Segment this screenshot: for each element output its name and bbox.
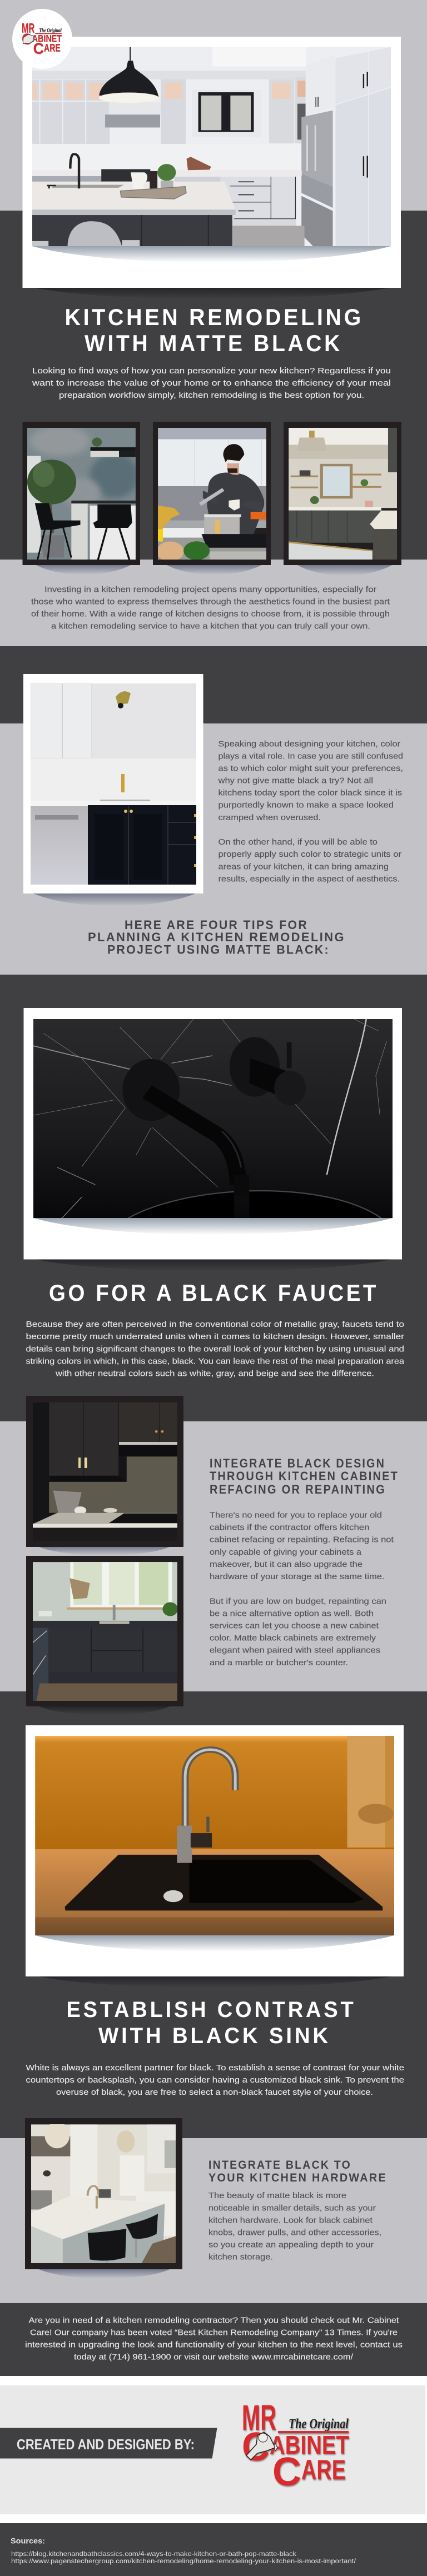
- title: [64, 304, 364, 356]
- logo badge: [12, 9, 72, 69]
- heading: kitchen hardware: [208, 2158, 387, 2184]
- paragraph: faucet: with other neutral colors such as white, gray, and beige and see the difference.: [55, 1369, 374, 1378]
- paragraph: designing your kitchen: purportedly known to make a space looked: [218, 801, 394, 810]
- title: establish contrast: ESTABLISH CONTRAST: [67, 1998, 356, 2022]
- footer logo: C: [242, 2425, 270, 2469]
- paragraph: faucet: [26, 1320, 405, 1378]
- title: KITCHEN REMODELING: [64, 304, 364, 330]
- title: establish contrast: WITH BLACK SINK: [98, 2024, 331, 2048]
- paragraph: refacing: cabinets if the contractor offers kitchen: [210, 1524, 369, 1532]
- heading: cabinet refacing: THROUGH KITCHEN CABINET: [210, 1469, 399, 1483]
- closing call to action: [25, 2316, 403, 2362]
- paragraph: refacing: only capable of giving your cabinets a: [210, 1548, 362, 1557]
- paragraph: faucet: striking colors in which, in this case, black. You can leave the rest of the meal preparation area: [26, 1357, 405, 1366]
- paragraph: hardware: kitchen hardware. Look for black cabinet: [208, 2216, 373, 2225]
- sources: [11, 2537, 356, 2565]
- footer logo: ARE: [301, 2454, 346, 2485]
- footer logo: [242, 2398, 349, 2494]
- paragraph: refacing: elegant when paired with steel appliances: [210, 1646, 380, 1655]
- paragraph: designing your kitchen: as to which color might suit your preferences,: [218, 765, 403, 773]
- paragraph: faucet: become pretty much underrated units when it comes to kitchen design. However, smaller: [26, 1332, 404, 1341]
- intro paragraph: preparation workflow simply, kitchen remodeling is the best option for you.: [59, 391, 364, 400]
- hero image scene: [32, 47, 391, 246]
- paragraph: faucet: details can bring significant changes to the overall look of your kitchen by using unusual and: [26, 1345, 404, 1354]
- paragraph: designing your kitchen: kitchens today sport the color black since it is: [218, 789, 402, 798]
- paragraph: designing your kitchen: why not give matte black a try? Not all: [217, 777, 373, 786]
- paragraph: designing your kitchen: [217, 740, 403, 883]
- paragraph: refacing: hardware of your storage at the same time.: [210, 1572, 385, 1581]
- footer logo: The Original: [289, 2417, 349, 2432]
- paragraph: refacing: services can let you choose a new cabinet: [210, 1621, 379, 1630]
- paragraph: refacing: But if you are low on budget, repainting can: [210, 1597, 386, 1606]
- heading: cabinet refacing: INTEGRATE BLACK DESIGN: [210, 1456, 385, 1470]
- title: establish contrast: [67, 1998, 356, 2048]
- heading: go for a black faucet: GO FOR A BLACK FAUCET: [49, 1280, 379, 1306]
- photo: black sink with orange backsplash: [26, 1725, 404, 1988]
- paragraph: hardware: The beauty of matte black is more: [208, 2191, 346, 2200]
- photo: subway tile kitchen: [284, 422, 401, 576]
- sources: https://www.pagenstechergroup.com/kitchen-remodeling/home-remodeling-your-kitchen-is-most-important/: [11, 2557, 356, 2565]
- paragraph: designing your kitchen: cramped when overused.: [218, 813, 321, 822]
- paragraph: black sink: White is always an excellent partner for black. To establish a sense of contrast for your white: [26, 2064, 404, 2073]
- logo badge mark: [22, 21, 62, 57]
- paragraph: hardware: [208, 2191, 381, 2262]
- paragraph: refacing: color. Matte black cabinets are extremely: [210, 1634, 376, 1643]
- paragraph: hardware: kitchen storage.: [208, 2253, 273, 2262]
- logo badge mark: ARE: [44, 42, 61, 53]
- paragraph: designing your kitchen: properly apply such color to strategic units or: [218, 850, 401, 859]
- paragraph: refacing: be a nice alternative option as well. Both: [210, 1609, 374, 1618]
- paragraph: investing: of their home. With a wide range of kitchen designs to choose from, it is possible through: [31, 610, 390, 619]
- paragraph: investing: [31, 586, 390, 631]
- paragraph: refacing: and a marble or butcher's counter.: [210, 1659, 348, 1668]
- credit banner: [0, 2428, 217, 2458]
- heading: four tips: HERE ARE FOUR TIPS FOR: [125, 918, 308, 932]
- paragraph: hardware: knobs, drawer pulls, and other accessories,: [208, 2228, 381, 2237]
- logo badge mark: ABINET: [32, 33, 62, 44]
- photo: white and black cabinets: [23, 674, 203, 906]
- paragraph: refacing: cabinet refacing or repainting. Refacing is not: [210, 1536, 394, 1545]
- paragraph: investing: those who wanted to express themselves through the aesthetics found in the busiest part: [31, 598, 390, 607]
- title: WITH MATTE BLACK: [85, 330, 342, 356]
- intro paragraph: want to increase the value of your home or to enhance the efficiency of your meal: [32, 379, 391, 388]
- sources: https://blog.kitchenandbathclassics.com/4-ways-to-make-kitchen-or-bath-pop-matte-black: [11, 2550, 297, 2558]
- intro paragraph: [32, 367, 391, 400]
- paragraph: designing your kitchen: Speaking about designing your kitchen, color: [218, 740, 400, 749]
- paragraph: black sink: [26, 2064, 404, 2097]
- logo badge mark: C: [33, 39, 44, 57]
- photo: dark wood cabinets: [26, 1396, 183, 1555]
- logo badge mark: MR: [22, 21, 34, 36]
- closing call to action: Care! Our company has been voted “Best Kitchen Remodeling Company” 13 Times. If you're: [30, 2328, 398, 2337]
- heading: four tips: PROJECT USING MATTE BLACK:: [107, 942, 330, 957]
- photo: man cooking: [153, 422, 271, 575]
- paragraph: refacing: makeover, but it can also upgrade the: [210, 1560, 363, 1569]
- paragraph: investing: Investing in a kitchen remodeling project opens many opportunities, especially for: [44, 586, 376, 595]
- panel: hero kitchen photo: [22, 37, 401, 299]
- paragraph: refacing: There's no need for you to replace your old: [210, 1511, 382, 1520]
- closing call to action: interested in upgrading the look and functionality of your kitchen to the next level, contact us: [25, 2340, 403, 2349]
- footer logo: C: [272, 2450, 301, 2494]
- paragraph: refacing: [210, 1511, 394, 1668]
- heading: kitchen hardware: YOUR KITCHEN HARDWARE: [208, 2171, 387, 2184]
- paragraph: black sink: countertops or backsplash, you can consider having a customized black sink. To prevent the: [26, 2076, 404, 2085]
- paragraph: hardware: so you create an appealing depth to your: [208, 2240, 374, 2249]
- logo badge mark: The Original: [39, 28, 62, 33]
- heading: cabinet refacing: REFACING OR REPAINTING: [210, 1482, 386, 1496]
- photo: white kitchen island: [25, 2118, 182, 2278]
- paragraph: faucet: Because they are often perceived in the conventional color of metallic gray, faucets tend to: [26, 1320, 404, 1329]
- footer logo: MR: [242, 2398, 276, 2438]
- sources: Sources:: [11, 2537, 45, 2545]
- paragraph: black sink: overuse of black, you are free to select a non-black faucet style of your choice.: [56, 2088, 373, 2097]
- pendant lamp: [99, 47, 159, 103]
- paragraph: designing your kitchen: results, especially in the aspect of aesthetics.: [218, 875, 400, 883]
- logo badge mark: C: [22, 30, 32, 47]
- footer logo: ABINET: [270, 2430, 349, 2459]
- heading: four tips: [88, 918, 345, 957]
- paragraph: designing your kitchen: On the other hand, if you will be able to: [218, 838, 378, 847]
- heading: four tips: PLANNING A KITCHEN REMODELING: [88, 930, 345, 944]
- photo: dark cabinets with window: [26, 1556, 183, 1715]
- icon: mascot: [246, 2432, 277, 2460]
- paragraph: designing your kitchen: plays a vital role. In case you are still confused: [218, 752, 403, 761]
- credit banner: CREATED AND DESIGNED BY:: [17, 2436, 195, 2453]
- photo: dining stools: [22, 422, 140, 575]
- paragraph: investing: a kitchen remodeling service to have a kitchen that you can truly call your own.: [51, 622, 370, 631]
- photo: black wall faucet on marble: [23, 1008, 402, 1271]
- closing call to action: today at (714) 961-1900 or visit our website www.mrcabinetcare.com/: [74, 2353, 354, 2362]
- intro paragraph: Looking to find ways of how you can personalize your new kitchen? Regardless if you: [32, 367, 391, 376]
- paragraph: hardware: noticeable in smaller details, such as your: [208, 2204, 376, 2213]
- closing call to action: Are you in need of a kitchen remodeling contractor? Then you should check out Mr. Cabinet: [29, 2316, 399, 2325]
- paragraph: designing your kitchen: areas of your kitchen, it can bring amazing: [218, 862, 389, 871]
- heading: kitchen hardware: INTEGRATE BLACK TO: [208, 2158, 351, 2171]
- heading: cabinet refacing: [210, 1456, 399, 1496]
